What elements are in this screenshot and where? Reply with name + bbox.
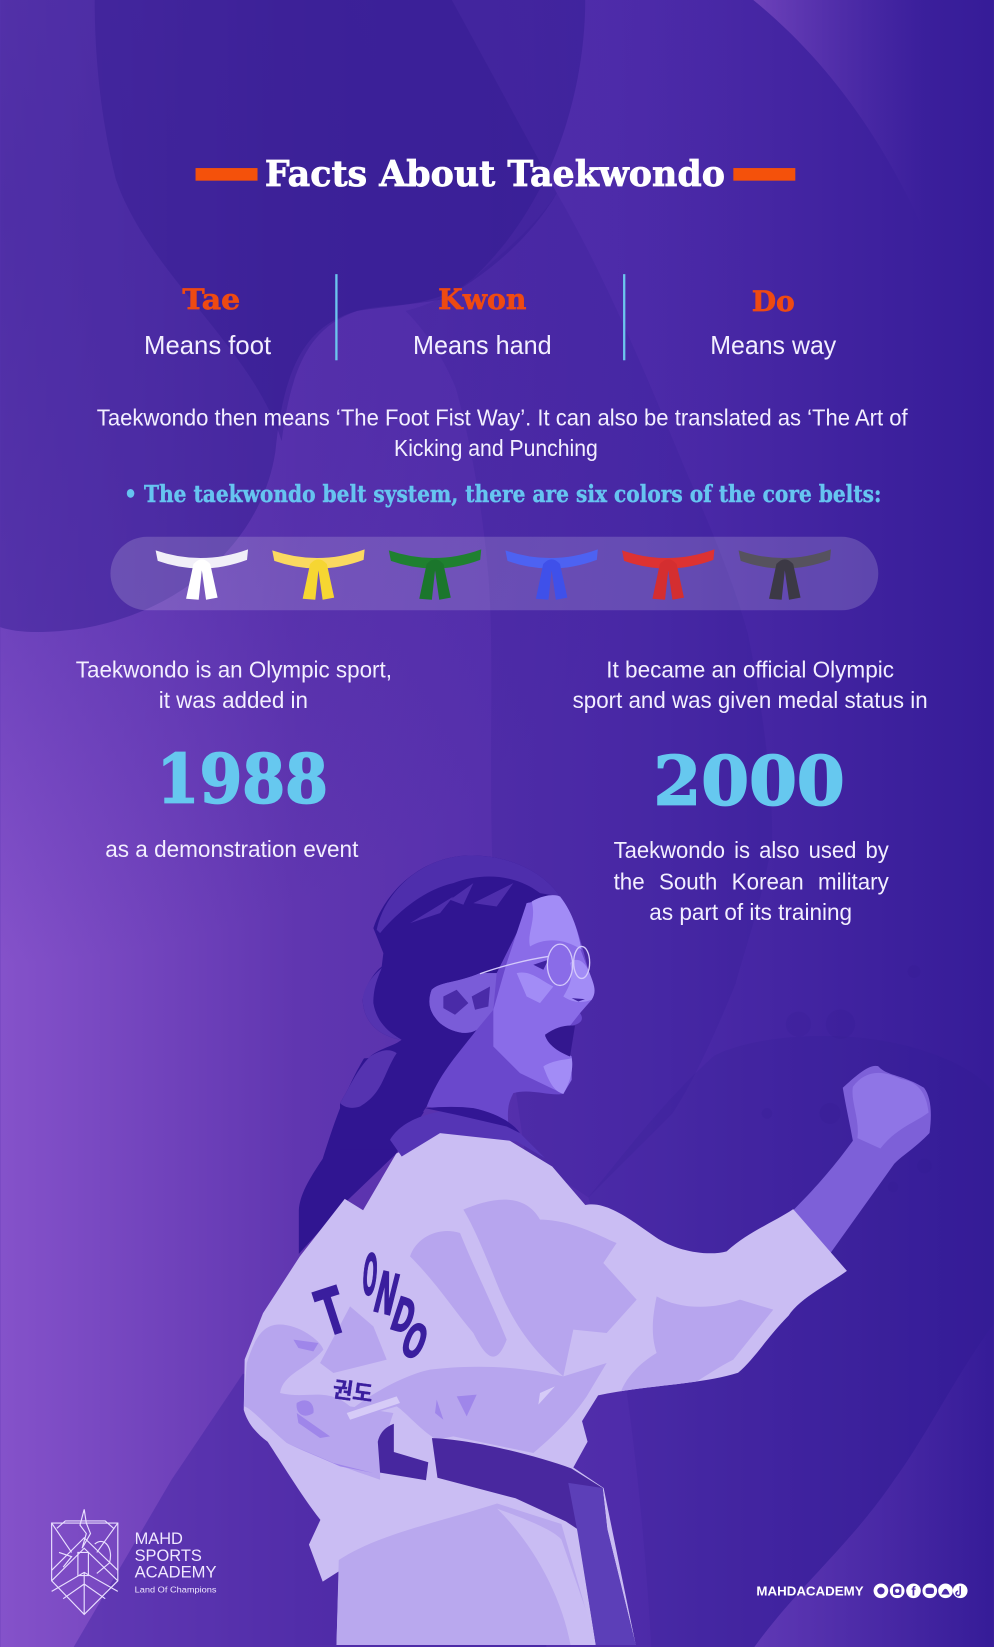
right fact: 2000: It became an official Olympic bbox=[606, 656, 894, 682]
ponytail behind gi bbox=[299, 1056, 424, 1254]
brand name: MAHD bbox=[135, 1530, 183, 1548]
glasses bbox=[480, 944, 590, 985]
brand name: Land Of Champions bbox=[135, 1585, 217, 1594]
face mid tone bbox=[493, 896, 592, 1094]
neck and face shadow bbox=[427, 896, 594, 1123]
gi accents bbox=[287, 1340, 477, 1473]
left fact: 1988 bbox=[76, 656, 392, 862]
brand name: ACADEMY bbox=[135, 1564, 217, 1582]
eye and nostril bbox=[533, 960, 585, 1001]
right fact: 2000: sport and was given medal status in bbox=[573, 687, 928, 713]
fist highlight bbox=[852, 1073, 929, 1148]
torso shading bbox=[243, 1200, 773, 1480]
back lettering: D bbox=[385, 1287, 422, 1345]
social handle: MAHDACADEMY bbox=[756, 1585, 864, 1599]
back lettering: T bbox=[308, 1275, 356, 1352]
right fact: 2000: Taekwondo is also used by bbox=[614, 837, 889, 863]
meaning: Kwon: Kwon bbox=[438, 282, 526, 316]
belt: yellow bbox=[272, 549, 365, 600]
meaning: Tae bbox=[144, 282, 272, 360]
right fact: 2000: 2000 bbox=[654, 742, 845, 821]
left fact: 1988: as a demonstration event bbox=[105, 836, 359, 862]
belt: black bbox=[739, 549, 831, 600]
icon: shield crest bbox=[52, 1509, 118, 1614]
social handle bbox=[756, 1583, 968, 1599]
icons: social media bbox=[874, 1583, 968, 1599]
belt tail bbox=[568, 1483, 636, 1645]
bun and ponytail highlight bbox=[340, 968, 402, 1108]
lower gi light fold bbox=[497, 1509, 598, 1645]
collar bbox=[390, 1108, 545, 1158]
belt bbox=[432, 1438, 636, 1645]
meaning: Kwon bbox=[413, 282, 552, 360]
belt: green bbox=[389, 549, 481, 600]
gi bbox=[244, 1133, 847, 1645]
logo bbox=[52, 1509, 217, 1614]
ear bbox=[429, 973, 497, 1033]
belt pill panel bbox=[110, 537, 878, 610]
mouth bbox=[545, 1026, 575, 1056]
dark blob bbox=[0, 0, 585, 632]
right fact: 2000: as part of its training bbox=[649, 899, 852, 925]
darker inner blob bbox=[95, 0, 557, 441]
back lettering: O bbox=[394, 1312, 435, 1371]
right fact: 2000: the South Korean military bbox=[614, 869, 889, 895]
belt: white bbox=[156, 549, 248, 600]
meaning: Do: Means way bbox=[710, 330, 837, 360]
head bbox=[340, 856, 595, 1158]
belt: blue bbox=[505, 549, 598, 600]
left fact: 1988: 1988 bbox=[157, 739, 328, 818]
brand name: SPORTS bbox=[135, 1547, 202, 1565]
upper hair highlight bbox=[377, 856, 560, 933]
meaning: Tae: Tae bbox=[182, 282, 240, 316]
left fact: 1988: Taekwondo is an Olympic sport, bbox=[76, 656, 392, 682]
splatter texture bbox=[762, 965, 932, 1192]
lower gi shading bbox=[336, 1503, 596, 1645]
forearm and fist bbox=[793, 1066, 931, 1254]
back lettering bbox=[311, 1252, 427, 1402]
athlete illustration bbox=[243, 856, 931, 1645]
meaning: Do bbox=[710, 284, 837, 360]
hair bbox=[340, 856, 560, 1150]
translation paragraph: Taekwondo then means ‘The Foot Fist Way’. It can also be translated as ‘The Art of bbox=[97, 404, 908, 430]
icons: social media: f bbox=[911, 1585, 916, 1599]
translation paragraph: Kicking and Punching bbox=[394, 435, 598, 461]
translation paragraph bbox=[97, 404, 908, 461]
belt: red bbox=[622, 549, 714, 600]
back lettering: O bbox=[360, 1241, 380, 1309]
back lettering: N bbox=[368, 1260, 405, 1329]
face highlights bbox=[517, 895, 595, 1094]
divider bbox=[623, 274, 625, 360]
belt heading: • The taekwondo belt system, there are six colors of the core belts: bbox=[124, 481, 881, 508]
meaning: Tae: Means foot bbox=[144, 330, 272, 360]
ear detail bbox=[443, 986, 490, 1015]
title: Facts About Taekwondo bbox=[265, 153, 725, 195]
meaning: Kwon: Means hand bbox=[413, 330, 552, 360]
left fact: 1988: it was added in bbox=[159, 687, 308, 713]
brand name bbox=[135, 1530, 217, 1594]
meaning: Do: Do bbox=[752, 284, 795, 318]
divider bbox=[335, 274, 338, 360]
belt left piece bbox=[378, 1424, 428, 1480]
gi bright folds bbox=[347, 1386, 555, 1420]
back lettering: 권도 bbox=[331, 1372, 375, 1409]
right fact: 2000 bbox=[573, 656, 928, 925]
